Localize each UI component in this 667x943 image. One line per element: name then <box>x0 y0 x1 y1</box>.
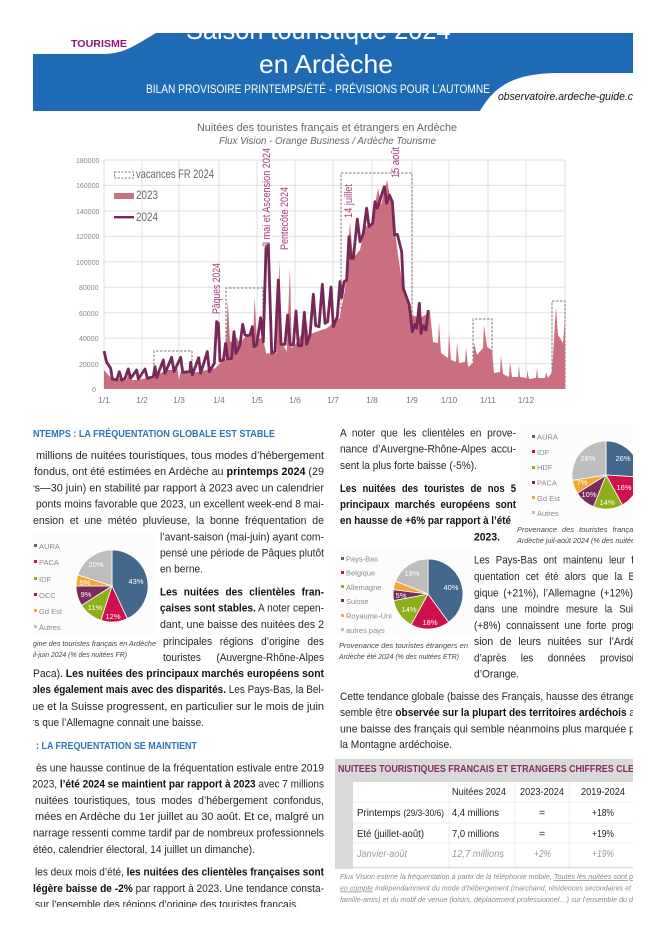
text block: printemps intro: en berne. <box>160 564 203 576</box>
text block: right column intro: 2023. <box>474 532 500 544</box>
section heading: printemps: NTEMPS : LA FRÉQUENTATION GLOBALE EST STABLE <box>33 427 275 440</box>
chart subtitle: Flux Vision - Orange Business / Ardèche Tourisme <box>219 136 436 147</box>
text block: printemps intro <box>31 450 324 576</box>
pie legend <box>532 432 561 518</box>
text block: clientèles françaises printemps: ue et la Suisse progressent, en particulier sur le mois de juin <box>32 701 324 713</box>
x axis labels: 1/9 <box>406 395 418 405</box>
pie legend: Belgique <box>346 568 375 578</box>
text block: printemps intro: rs—30 juin) en stabilité par rapport à 2023 avec un calendrier <box>31 482 324 494</box>
text block: clientèles françaises printemps: çaises sont stables. A noter cepen- <box>160 602 324 614</box>
text block: clientèles françaises printemps: rs que l’Allemagne connait une baisse. <box>31 717 204 729</box>
pie caption <box>516 526 633 544</box>
pie chart: provenance touristes étrangers été: 5% <box>396 591 407 600</box>
chart legend: 2024 <box>136 210 158 224</box>
pie chart: provenance touristes étrangers été: 40% <box>443 583 459 592</box>
pie chart: origine touristes français printemps: 5% <box>80 578 91 587</box>
text block: marchés européens: d’Orange. <box>474 668 519 680</box>
pie legend: autres pays <box>346 626 385 635</box>
table row: janvier-août: +19% <box>592 848 614 860</box>
chart legend: vacances FR 2024 <box>136 167 214 181</box>
x axis labels: 1/11 <box>480 395 496 405</box>
line: 2024 <box>104 187 428 380</box>
table header row: 2023-2024 <box>520 786 564 798</box>
y axis labels: 100000 <box>76 260 99 267</box>
table row: janvier-août: 12,7 millions <box>452 848 505 860</box>
text block: printemps intro: ension et une météo pluvieuse, la bonne fréquentation de <box>33 515 324 527</box>
text block: été: légère baisse de -2% par rapport à 2023. Une tendance consta- <box>33 883 324 895</box>
pie caption <box>33 639 156 659</box>
table row: janvier-août: +2% <box>534 848 551 860</box>
text block: right column intro: sent la plus forte baisse (-5%). <box>340 460 477 472</box>
y axis labels: 120000 <box>76 234 99 241</box>
table row: printemps <box>358 808 614 818</box>
event annotations: Pentecôte 2024 <box>279 187 291 250</box>
y axis labels: 0 <box>92 387 96 394</box>
text block: printemps intro: pensé une période de Pâques plutôt <box>160 548 324 560</box>
pie caption: Provenance des touristes françai <box>517 525 635 534</box>
chart title: Nuitées des touristes français et étrangers en Ardèche <box>197 122 457 134</box>
y axis labels: 40000 <box>79 336 99 343</box>
pie chart: provenance touristes étrangers été: 14% <box>401 605 417 614</box>
x axis labels: 1/8 <box>366 395 378 405</box>
pie legend <box>34 542 63 632</box>
text block: été: 2023, l’été 2024 se maintient par rapport à 2023 avec 7 millions <box>32 778 324 790</box>
area: 2023 <box>104 180 565 389</box>
pie legend: Gd Est <box>39 607 63 616</box>
pie legend: Gd Est <box>537 494 561 503</box>
pie legend: Autres <box>537 509 559 518</box>
pie chart: origine touristes français printemps: 9% <box>81 590 92 599</box>
pie chart: provenance touristes français été: 26% <box>615 454 631 463</box>
text block: clientèles françaises printemps: Les nuitées des clientèles fran- <box>160 586 324 598</box>
pie caption: il-juin 2024 (% des nuitées FR) <box>33 650 127 659</box>
chart legend <box>114 167 214 224</box>
title: Saison touristique 2024 - <box>186 15 466 45</box>
table row: printemps: = <box>539 807 545 819</box>
table row: printemps: +18% <box>592 807 614 819</box>
table row: été: = <box>539 828 545 840</box>
table row: janvier-août <box>357 850 614 858</box>
text block: clientèles françaises printemps <box>31 586 324 729</box>
text block: été: les deux mois d’été, les nuitées des clientèles françaises sont <box>35 866 324 878</box>
pie chart: origine touristes français printemps: 43% <box>128 577 144 586</box>
title: en Ardèche <box>259 49 393 79</box>
x axis labels: 1/6 <box>289 395 301 405</box>
pie chart: origine touristes français printemps <box>33 533 156 659</box>
pie caption: Provenance des touristes étrangers en <box>339 641 468 650</box>
pie legend: AURA <box>39 542 60 551</box>
text block: right column intro: principaux marchés européens sont <box>340 499 516 511</box>
text block: tendance globale: une baisse des français qui semble néanmoins plus marquée p <box>340 724 635 736</box>
brand label: TOURISME <box>71 38 127 50</box>
pie legend: PACA <box>39 558 59 567</box>
event annotations: 15 août <box>390 147 402 178</box>
pie caption: Ardèche été 2024 (% des nuitées ETR) <box>338 652 459 661</box>
text block: été: mées en Ardèche du 1er juillet au 30 août. Et ce, malgré un <box>35 811 324 823</box>
x axis labels <box>98 397 534 403</box>
text block: été: nuitées touristiques, tous modes d’hébergement confondus, <box>35 795 324 807</box>
text block: printemps intro: ponts moins favorable que 2023, un excellent week-end 8 mai- <box>36 498 324 510</box>
pie legend <box>341 554 392 635</box>
text block: été: ès une hausse continue de la fréquentation estivale entre 2019 <box>36 762 324 774</box>
pie legend: IDF <box>39 575 52 584</box>
text block: tendance globale: la Montagne ardéchoise. <box>340 739 452 751</box>
x axis labels: 1/10 <box>441 395 458 405</box>
pie legend: Pays-Bas <box>346 554 378 564</box>
table row: printemps: 4,4 millions <box>452 807 499 819</box>
subtitle: BILAN PROVISOIRE PRINTEMPS/ÉTÉ - PRÉVISIONS POUR L’AUTOMNE <box>146 83 490 96</box>
y axis labels: 160000 <box>76 183 99 190</box>
text block: right column intro <box>340 428 516 544</box>
footnote: famille-amis) et du motif de venue (loisirs, déplacement professionnel…) sur l’ensemble du d <box>340 895 634 904</box>
text block: tendance globale: semble être observée sur la plupart des territoires ardéchois a <box>340 707 636 719</box>
table row: printemps: Printemps (29/3-30/6) <box>357 807 444 819</box>
pie legend: OCC <box>39 591 56 600</box>
section heading: été: : LA FREQUENTATION SE MAINTIENT <box>36 741 197 752</box>
x axis labels: 1/12 <box>518 395 535 405</box>
text block: printemps intro: fondus, ont été estimées en Ardèche au printemps 2024 (29 <box>34 466 324 478</box>
text block: printemps intro: l’avant-saison (mai-juin) ayant com- <box>160 532 324 544</box>
text block: été <box>32 762 324 911</box>
event annotations <box>211 147 402 314</box>
text block: marchés européens: Les Pays-Bas ont maintenu leur f <box>474 554 635 566</box>
footnote <box>340 872 634 904</box>
y axis labels <box>76 158 99 394</box>
pie chart: provenance touristes français été: 28% <box>580 454 596 463</box>
text block: marchés européens: sion de leurs nuitées sur l’Ardè <box>474 636 636 648</box>
text block: marchés européens: dans une moindre mesure la Sui <box>474 604 633 616</box>
table row: été <box>358 830 614 839</box>
footnote: Flux Vision estime la fréquentation à partir de la téléphonie mobile. Toutes les nuitées sont p <box>340 872 633 881</box>
pie legend: HDF <box>537 463 553 472</box>
y axis labels: 180000 <box>76 158 99 165</box>
table header row: 2019-2024 <box>581 786 625 798</box>
text block: right column intro: nance d’Auvergne-Rhône-Alpes accu- <box>340 444 516 456</box>
pie legend: PACA <box>537 478 557 488</box>
y axis labels: 80000 <box>79 285 99 292</box>
pie chart: provenance touristes français été: 7% <box>577 478 588 487</box>
header banner <box>33 33 633 111</box>
pie chart: provenance touristes français été: 10% <box>581 490 597 499</box>
table header row <box>452 788 625 795</box>
event annotations: 14 juillet <box>343 184 355 218</box>
pie caption <box>338 642 468 660</box>
text block: clientèles françaises printemps: Paca). Les nuitées des principaux marchés européens sont <box>33 668 324 680</box>
line and area chart: nuitées <box>76 122 565 405</box>
pie legend: Royaume-Uni <box>346 612 392 620</box>
text block: tendance globale: Cette tendance globale (baisse des Français, hausse des étrange <box>340 691 635 703</box>
pie chart: origine touristes français printemps: 20% <box>88 560 104 569</box>
event annotations: Pâques 2024 <box>211 263 223 314</box>
text block: été: sur l’ensemble des régions d’origine des touristes français. <box>35 899 299 911</box>
text block: printemps intro: millions de nuitées touristiques, tous modes d’hébergement <box>36 450 324 462</box>
table row: été: Eté (juillet-août) <box>357 828 424 840</box>
y axis labels: 20000 <box>79 362 99 369</box>
pie legend: IDF <box>537 448 550 457</box>
pie chart: provenance touristes français été <box>516 434 633 544</box>
pie legend: AURA <box>537 432 558 442</box>
text block: été: étéo, calendrier électoral, 14 juillet un dimanche). <box>33 844 255 856</box>
x axis labels: 1/2 <box>136 395 148 405</box>
table row: été: +19% <box>592 828 614 840</box>
text block: right column intro: en hausse de +6% par rapport à l’été <box>340 515 511 527</box>
table row: été: 7,0 millions <box>452 828 499 840</box>
text block: clientèles françaises printemps: principales régions d’origine des <box>163 636 324 648</box>
text block: marchés européens: (+8%) connaissent une forte progr <box>474 620 635 632</box>
text block: marchés européens: quentation cet été alors que la B <box>474 571 635 583</box>
title <box>187 33 450 74</box>
footnote: en compte indépendamment du mode d’hébergement (marchand, résidences secondaires et <box>340 884 632 892</box>
text block: clientèles françaises printemps: dant, une baisse des nuitées des 2 <box>160 619 324 631</box>
text block: tendance globale <box>340 691 636 751</box>
x axis labels: 1/3 <box>173 395 185 405</box>
table header row: Nuitées 2024 <box>452 786 506 798</box>
table: chiffres clés <box>335 759 634 869</box>
pie caption: Ardèche juil-août 2024 (% des nuitée <box>516 536 635 545</box>
text block: right column intro: A noter que les clientèles en prove- <box>340 428 516 440</box>
x axis labels: 1/5 <box>251 395 263 405</box>
dashed boxes: vacances FR 2024 <box>154 173 565 389</box>
pie chart: provenance touristes étrangers été: 19% <box>404 569 420 578</box>
y axis labels: 140000 <box>76 209 99 216</box>
pie chart: origine touristes français printemps: 11% <box>88 603 103 612</box>
pie chart: provenance touristes étrangers été: 18% <box>422 618 438 627</box>
pie caption: gine des touristes français en Ardèche <box>33 639 156 648</box>
y axis labels: 60000 <box>79 311 99 318</box>
text block: marchés européens: gique (+21%), l’Allemagne (+12%) <box>474 588 633 600</box>
text block: été: narrage ressenti comme tardif par de nombreux professionnels <box>33 828 324 840</box>
pie chart: provenance touristes français été: 16% <box>616 483 632 492</box>
pie chart: provenance touristes français été: 14% <box>599 498 615 507</box>
website: observatoire.ardeche-guide.c <box>498 91 633 103</box>
x axis labels: 1/1 <box>98 395 110 405</box>
table row: janvier-août: Janvier-août <box>356 848 408 860</box>
text block: marchés européens <box>474 554 636 680</box>
pie chart: origine touristes français printemps: 12% <box>105 612 121 621</box>
chart legend: 2023 <box>136 188 158 202</box>
text block: right column intro: Les nuitées des touristes de nos 5 <box>340 483 516 495</box>
pie chart: provenance touristes étrangers été <box>338 556 468 660</box>
pie legend: Suisse <box>346 597 369 606</box>
text block: marchés européens: d’après les données provisoi <box>474 652 634 664</box>
pie legend: Allemagne <box>346 583 381 592</box>
event annotations: 8 mai et Ascension 2024 <box>261 148 273 247</box>
text block: clientèles françaises printemps: bles également mais avec des disparités. Les Pays-Bas, la Bel- <box>31 684 324 696</box>
text block: clientèles françaises printemps: touristes (Auvergne-Rhône-Alpes <box>163 652 324 664</box>
x axis labels: 1/4 <box>213 395 225 405</box>
x axis labels: 1/7 <box>327 395 339 405</box>
pie legend: Autres <box>39 623 61 632</box>
